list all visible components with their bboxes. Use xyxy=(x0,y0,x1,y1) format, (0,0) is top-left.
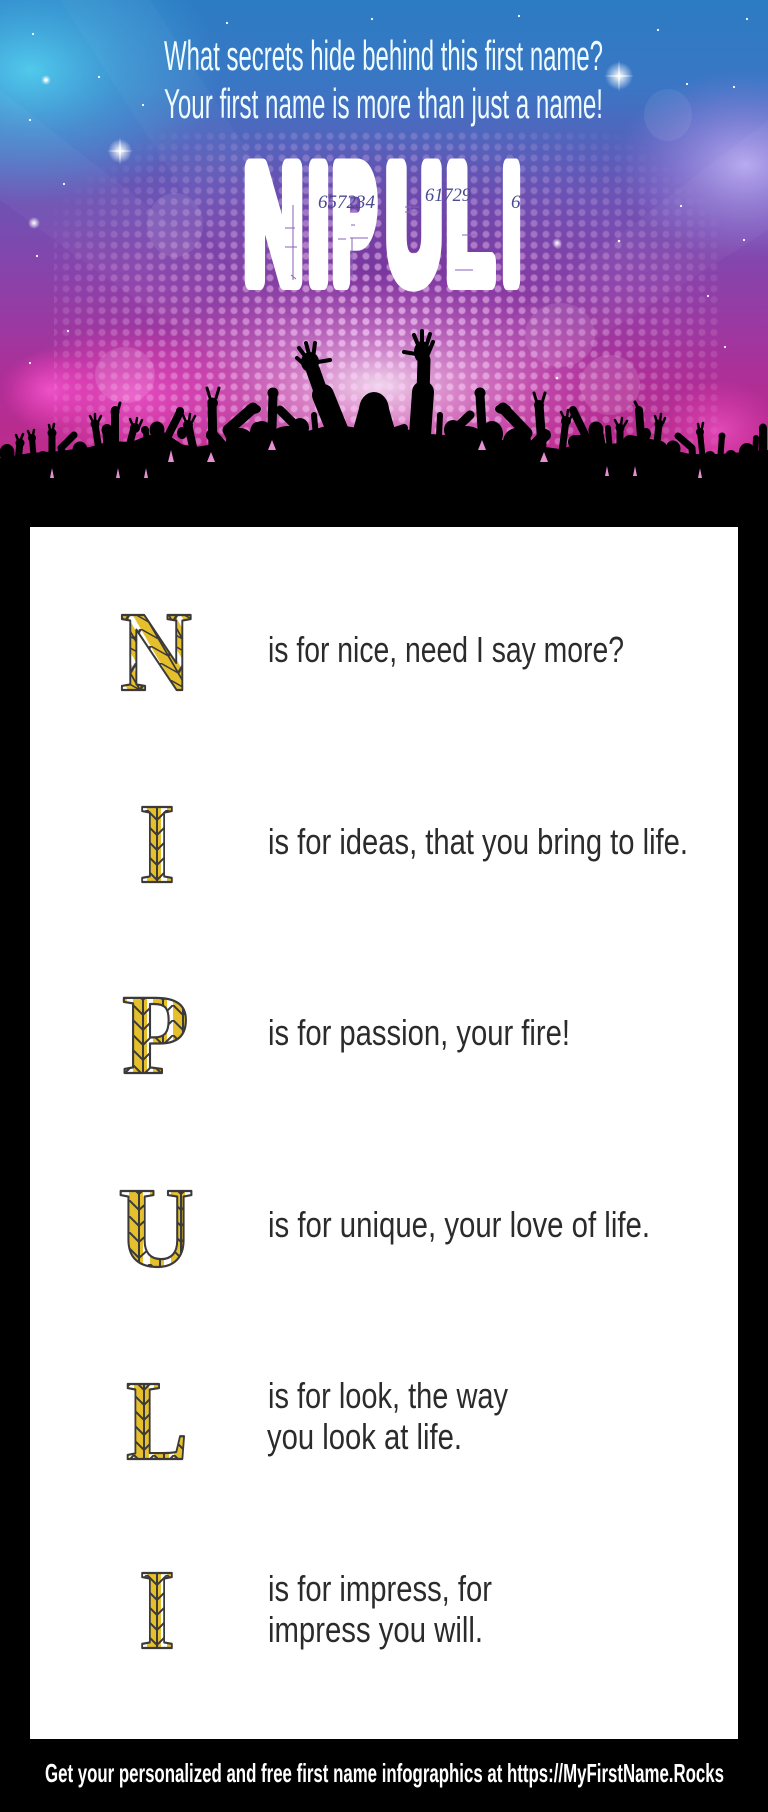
row L xyxy=(126,1357,508,1484)
text I second xyxy=(268,1568,492,1650)
letter I: I xyxy=(139,780,175,907)
text I second: is for impress, for xyxy=(268,1568,492,1609)
row I second xyxy=(139,1546,492,1673)
name title: N xyxy=(244,134,303,315)
row P xyxy=(122,971,570,1098)
text L: you look at life. xyxy=(267,1416,462,1457)
header stage background xyxy=(0,0,768,500)
name title xyxy=(244,134,521,315)
letter I second: I xyxy=(139,1546,175,1673)
row U xyxy=(118,1164,650,1291)
crowd silhouette xyxy=(0,331,768,527)
white panel xyxy=(30,527,738,1739)
row N xyxy=(120,588,624,715)
left crowd xyxy=(111,410,119,450)
row I xyxy=(139,780,688,907)
name title: 657234 xyxy=(318,192,376,213)
letter L: L xyxy=(126,1357,188,1484)
text U: is for unique, your love of life. xyxy=(268,1204,650,1245)
text L: is for look, the way xyxy=(268,1375,508,1416)
name title: P xyxy=(332,134,376,315)
name title: U xyxy=(386,134,442,315)
text N: is for nice, need I say more? xyxy=(268,629,624,670)
sparkle stars xyxy=(28,60,634,248)
text: I xyxy=(502,134,520,315)
main arms xyxy=(313,370,323,398)
letter U: U xyxy=(118,1164,194,1291)
letter N: N xyxy=(120,588,192,715)
letter P: P xyxy=(122,971,189,1098)
text P: is for passion, your fire! xyxy=(268,1012,570,1053)
right crowd xyxy=(562,420,566,452)
name title: 61729 xyxy=(425,185,471,206)
name title: 6 xyxy=(511,192,521,213)
text I second: impress you will. xyxy=(268,1609,483,1650)
name title: I xyxy=(308,134,329,315)
mid fists and leaning arms xyxy=(272,395,273,428)
name title: L xyxy=(446,134,494,315)
text L xyxy=(267,1375,508,1457)
